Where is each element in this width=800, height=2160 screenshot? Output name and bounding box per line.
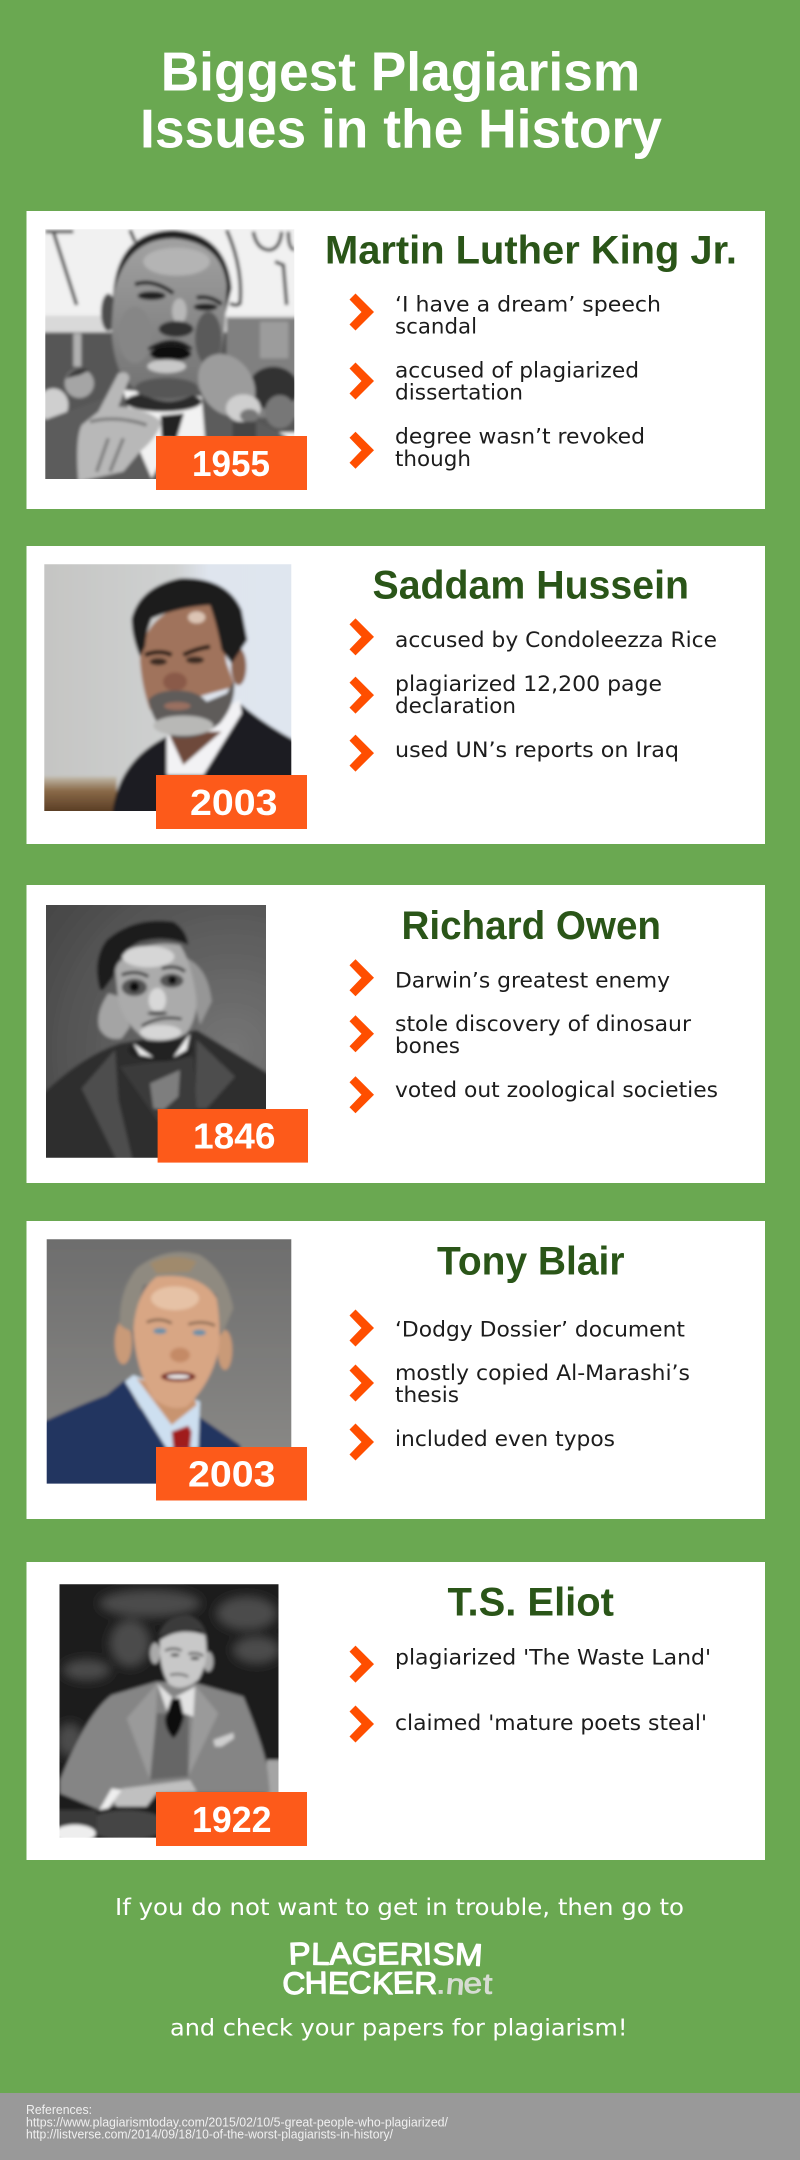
panel: T.S. Eliot	[26, 1562, 765, 1860]
bullet: included typos: included even typos	[395, 1427, 615, 1452]
year badge: 1846: 1846	[193, 1116, 276, 1157]
bullet: stole discovery: stole discovery of dinosaur	[395, 1012, 691, 1037]
bullet: plagiarized declaration: declaration	[395, 694, 516, 719]
photo: Tony Blair	[46, 1239, 292, 1484]
bullet: degree not revoked	[350, 424, 645, 472]
name heading: Martin Luther King Jr.: Martin Luther King Jr.	[325, 229, 737, 273]
bullet: plagiarized declaration: plagiarized 12,200 page	[395, 672, 662, 697]
bullet: accused by Condoleezza Rice: accused by Condoleezza Rice	[395, 628, 717, 653]
bullet list	[350, 618, 717, 772]
bullet: plagiarized dissertation: accused of plagiarized	[395, 359, 639, 384]
year badge: 2003	[156, 1447, 307, 1500]
bullet: used UN reports: used UN’s reports on Iraq	[395, 738, 679, 763]
references footer: https://www.plagiarismtoday.com/2015/02/10/5-great-people-who-plagiarized/	[26, 2116, 449, 2130]
bullet: Darwin's greatest enemy	[350, 959, 670, 996]
references footer: References:	[26, 2103, 92, 2117]
panel: Martin Luther King Jr.	[26, 211, 765, 509]
year badge: 1955	[156, 436, 307, 490]
logo: Plagerism Checker: PLAGERISM	[288, 1936, 483, 1973]
bullet: included typos	[350, 1424, 615, 1460]
bullet: Dodgy Dossier: ‘Dodgy Dossier’ document	[395, 1318, 685, 1343]
bullet: degree not revoked: though	[395, 447, 471, 472]
call to action: top line: If you do not want to get in trouble, then go to	[115, 1895, 684, 1921]
year badge: 2003: 2003	[190, 782, 278, 823]
bullet: mature poets steal	[350, 1706, 707, 1742]
bullet list	[350, 959, 718, 1113]
bullet: voted out	[350, 1076, 718, 1113]
bullet: mature poets steal: claimed 'mature poets steal'	[395, 1711, 707, 1736]
bullet: plagiarized declaration	[350, 672, 662, 719]
panel: Richard Owen	[26, 885, 765, 1183]
name heading: Richard Owen: Richard Owen	[402, 904, 661, 948]
title: Biggest Plagiarism	[161, 41, 640, 103]
name heading: Tony Blair: Tony Blair	[437, 1240, 624, 1284]
bullet: used UN reports	[350, 735, 679, 772]
title	[140, 41, 662, 160]
bullet: Dodgy Dossier	[350, 1310, 685, 1346]
bullet: dream speech scandal: scandal	[395, 315, 477, 340]
bullet: mostly copied	[350, 1361, 690, 1408]
logo: Plagerism Checker: CHECKER	[282, 1965, 437, 2001]
bullet: The Waste Land	[350, 1646, 711, 1683]
bullet: dream speech scandal: ‘I have a dream’ speech	[395, 293, 661, 318]
bullet list	[350, 1310, 690, 1460]
bullet: Darwin's greatest enemy: Darwin’s greatest enemy	[395, 968, 670, 994]
bullet: plagiarized dissertation	[350, 359, 639, 406]
year badge: 1922: 1922	[192, 1799, 272, 1840]
logo: Plagerism Checker	[282, 1936, 493, 2002]
bullet list	[350, 293, 661, 472]
logo: Plagerism Checker: .net	[436, 1968, 493, 2002]
call to action: bottom line: and check your papers for plagiarism!	[170, 2016, 628, 2042]
year badge: 1846	[158, 1109, 308, 1163]
bullet list	[350, 1646, 711, 1742]
bullet: voted out: voted out zoological societies	[395, 1078, 718, 1103]
panel: Saddam Hussein	[26, 546, 765, 844]
photo: Saddam Hussein	[44, 564, 292, 811]
bullet: stole discovery	[350, 1012, 691, 1059]
references footer: http://listverse.com/2014/09/18/10-of-the-worst-plagiarists-in-history/	[26, 2128, 394, 2142]
panel: Tony Blair	[26, 1221, 765, 1519]
bullet: accused by Condoleezza Rice	[350, 618, 717, 655]
references footer	[0, 2093, 800, 2160]
title: Issues in the History	[140, 98, 662, 160]
photo: Richard Owen	[46, 905, 266, 1158]
bullet: mostly copied: mostly copied Al-Marashi’s	[395, 1361, 690, 1386]
bullet: degree not revoked: degree wasn’t revoked	[395, 424, 645, 450]
photo: T.S. Eliot	[60, 1584, 278, 1838]
year badge: 2003	[156, 775, 307, 829]
name heading: T.S. Eliot: T.S. Eliot	[448, 1580, 614, 1624]
year badge: 2003: 2003	[188, 1454, 276, 1495]
bullet: The Waste Land: plagiarized 'The Waste Land'	[395, 1646, 711, 1670]
year badge: 1922	[156, 1792, 307, 1846]
bullet: dream speech scandal	[350, 293, 661, 340]
year badge: 1955: 1955	[192, 443, 270, 484]
bullet: mostly copied: thesis	[395, 1383, 459, 1408]
name heading: Saddam Hussein: Saddam Hussein	[372, 564, 689, 608]
bullet: stole discovery: bones	[395, 1034, 460, 1059]
bullet: plagiarized dissertation: dissertation	[395, 381, 523, 406]
photo: Martin Luther King Jr.	[45, 229, 294, 479]
